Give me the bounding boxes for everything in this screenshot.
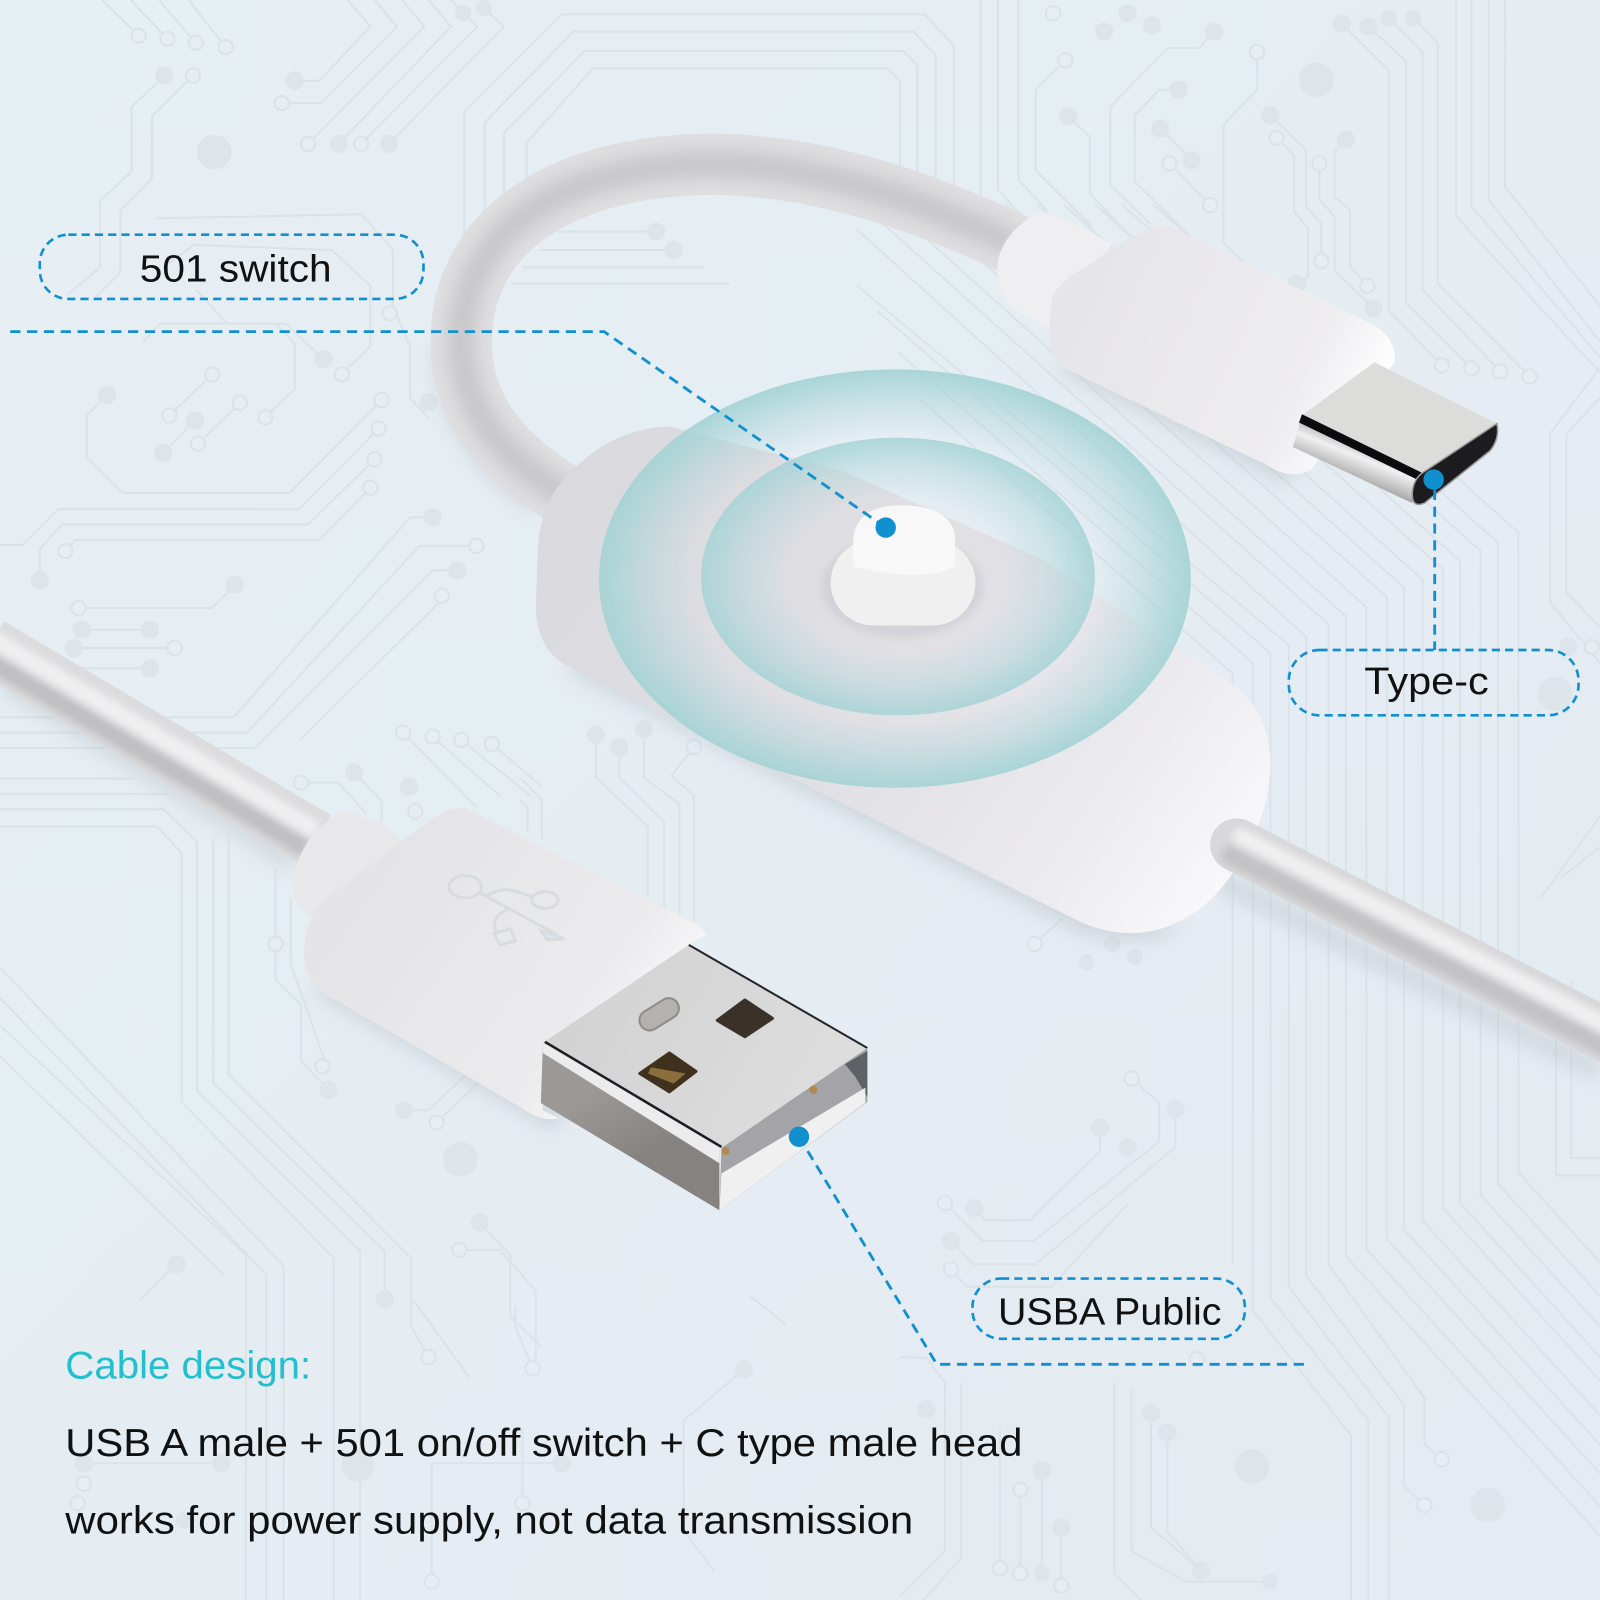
housing — [1049, 226, 1395, 474]
callout: USBA Public: USBA Public — [998, 1290, 1221, 1332]
metal side — [541, 1045, 719, 1210]
Type-C connector — [998, 211, 1498, 504]
metal top — [1302, 362, 1497, 473]
strain relief — [293, 811, 403, 916]
outer pulse ring — [599, 369, 1191, 788]
cable: loop to Type-C — [461, 164, 1015, 502]
cable: left USB lead — [0, 637, 316, 849]
cable: right lead — [1231, 837, 1600, 1061]
metal opening — [719, 1048, 867, 1210]
callout: Type-c — [1289, 469, 1579, 715]
text block: cable design: works for power supply, not data transmission — [64, 1500, 913, 1543]
holes — [636, 994, 683, 1034]
callout: USBA Public — [789, 1127, 1309, 1364]
callout: 501 switch: 501 switch — [140, 248, 332, 290]
text block: cable design — [64, 1345, 1022, 1543]
push button — [820, 505, 984, 638]
inner pulse ring — [701, 438, 1095, 715]
switch body — [536, 427, 1270, 933]
text block: cable design: USB A male + 501 on/off switch + C type male head — [65, 1422, 1022, 1465]
text block: cable design: Cable design: — [65, 1345, 311, 1388]
callout: 501 switch — [10, 235, 896, 538]
USB-A connector — [293, 808, 867, 1210]
metal top — [543, 945, 867, 1148]
strain relief — [998, 211, 1112, 329]
callout: Type-c: Type-c — [1364, 660, 1489, 702]
soft shadows — [0, 347, 1600, 1131]
housing — [304, 808, 706, 1119]
usb logo — [449, 876, 564, 945]
opening — [1412, 423, 1498, 504]
metal side — [1293, 415, 1421, 503]
